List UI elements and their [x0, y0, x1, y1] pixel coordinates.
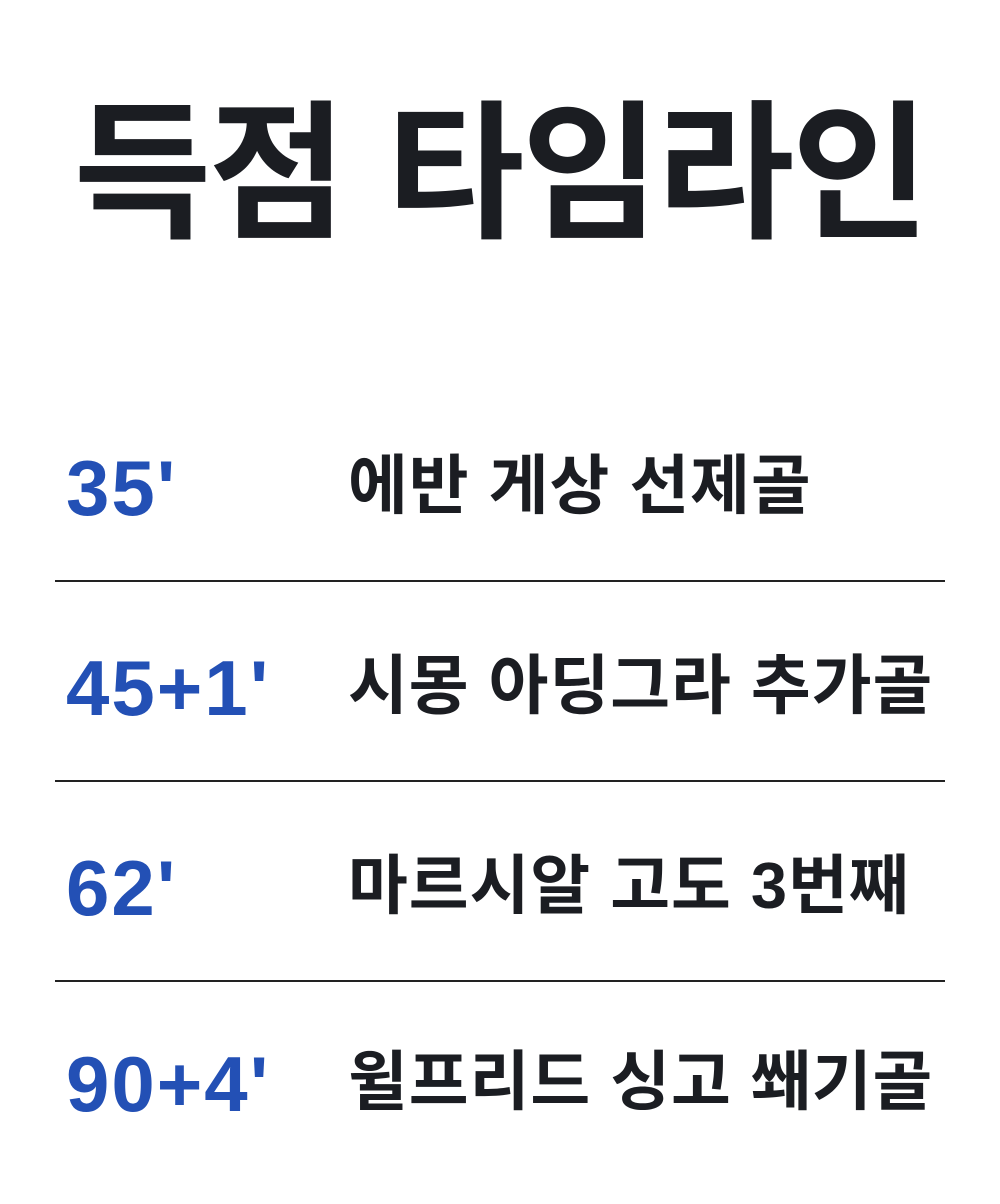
- row: 35': [66, 444, 812, 532]
- minute 62: 62': [66, 844, 177, 932]
- row: 90+4': [66, 1040, 933, 1128]
- minute 45+1: 45+1': [66, 644, 270, 732]
- event text 2: 시몽 아딩그라 추가골: [348, 649, 933, 722]
- row: 45+1': [66, 644, 933, 732]
- event text 3: 마르시알 고도 3번째: [348, 849, 910, 922]
- minute 90+4: 90+4': [66, 1040, 270, 1128]
- row: 62': [66, 844, 910, 932]
- title: 득점 타임라인: [73, 53, 927, 270]
- event text 1: 에반 게상 선제골: [348, 449, 812, 522]
- event text 4: 윌프리드 싱고 쐐기골: [348, 1045, 933, 1118]
- minute 35: 35': [66, 444, 177, 532]
